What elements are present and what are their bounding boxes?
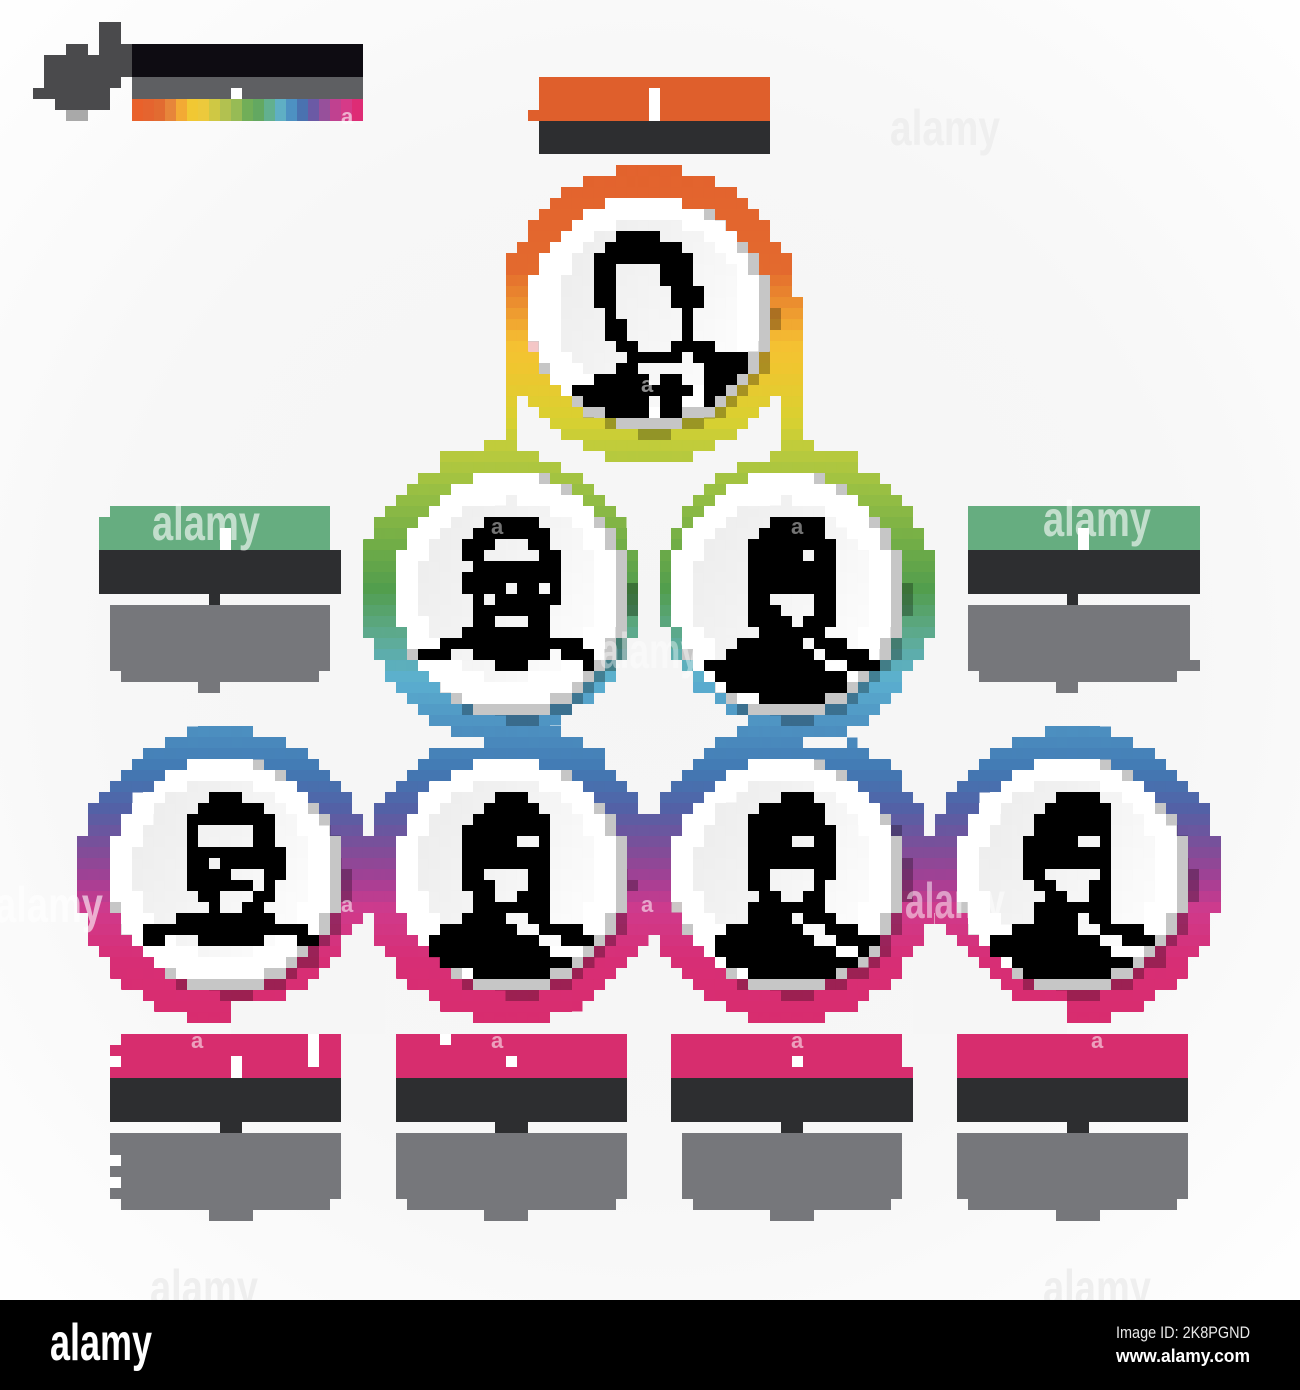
stock watermarks: alamy	[905, 873, 1005, 929]
icon: person in suit	[429, 792, 594, 979]
stock watermarks: a	[491, 514, 504, 539]
stock watermarks: a	[491, 1028, 504, 1053]
stock watermarks: alamy	[600, 623, 700, 679]
label: top node	[528, 77, 770, 154]
label: bottom node 4	[957, 1034, 1188, 1221]
cut-away on lower right of first bottom ring	[231, 913, 385, 1034]
icon: person with cap	[418, 517, 594, 671]
stock watermarks	[0, 100, 1151, 1316]
logo subtitle bar	[132, 77, 363, 99]
node: bottom portrait 4	[957, 760, 1195, 997]
icon: person with long hair	[572, 231, 748, 418]
node: middle-right portrait	[671, 473, 909, 722]
footer image id: Image ID: 2K8PGND	[1116, 1323, 1250, 1342]
stock watermarks: a	[791, 514, 804, 539]
footer url: www.alamy.com	[1115, 1346, 1250, 1366]
logo block	[33, 22, 363, 121]
icon: logo mark	[33, 22, 132, 121]
org chart rings and portraits	[77, 166, 1221, 1034]
logo rainbow strip	[132, 99, 363, 121]
node: top portrait	[528, 198, 776, 436]
footer wordmark: alamy	[50, 1314, 152, 1372]
logo title bar	[132, 44, 363, 77]
node: bottom portrait 3	[672, 760, 910, 997]
stock watermarks: alamy	[152, 495, 260, 551]
label: right middle node	[968, 506, 1200, 693]
stock watermarks: a	[641, 892, 654, 917]
icon: person in suit	[715, 792, 880, 979]
stock watermarks: a	[1091, 1028, 1104, 1053]
icon: person in suit	[704, 517, 880, 704]
label: bottom node 3	[671, 1034, 913, 1221]
icon: person with glasses	[143, 792, 319, 946]
stock watermarks: alamy	[890, 100, 1000, 156]
node: bottom portrait 2	[395, 760, 633, 997]
stock watermarks: a	[791, 1028, 804, 1053]
node: bottom portrait 1	[110, 760, 348, 997]
stock watermarks: a	[641, 372, 654, 397]
node: middle-left portrait	[396, 473, 634, 722]
stock watermarks: a	[341, 104, 354, 129]
stock watermarks: a	[341, 892, 354, 917]
cut-away on lower left of last bottom ring	[915, 924, 1067, 1034]
stock watermarks: alamy	[1043, 1260, 1151, 1316]
coloured ring backing and connectors	[77, 166, 1221, 1034]
stock watermarks: a	[191, 1028, 204, 1053]
stock watermarks: alamy	[1043, 491, 1151, 547]
label: bottom node 1	[110, 1034, 341, 1221]
stock watermarks: alamy	[150, 1260, 258, 1316]
icon: person in suit	[990, 792, 1155, 979]
label: bottom node 2	[396, 1034, 627, 1221]
footer bar	[0, 1300, 1300, 1390]
label: left middle node	[99, 506, 341, 693]
background gaps between the bridges	[451, 737, 847, 748]
